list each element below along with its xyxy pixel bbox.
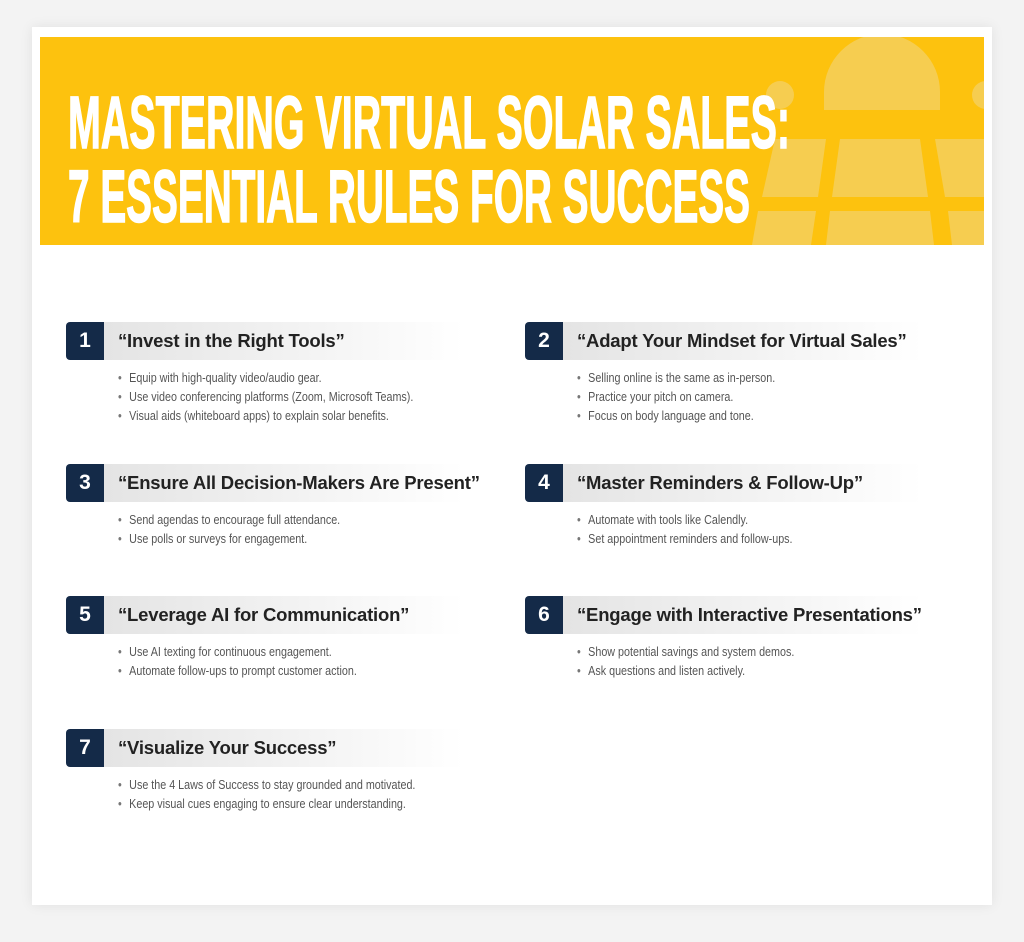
rule 7: 7 — [79, 736, 91, 759]
rule 5 — [66, 596, 409, 678]
text: Ask questions and listen actively. — [588, 664, 745, 678]
rule 4 — [525, 464, 863, 546]
rule 1: 1 — [79, 329, 91, 352]
text: Equip with high-quality video/audio gear. — [129, 371, 322, 385]
text: Show potential savings and system demos. — [588, 645, 794, 659]
rule 4: 4 — [538, 471, 550, 494]
text: Practice your pitch on camera. — [588, 390, 733, 404]
icon: solar panel decoration — [752, 34, 1000, 245]
rule 2: 2 — [538, 329, 550, 352]
text: Use video conferencing platforms (Zoom, Microsoft Teams). — [129, 390, 413, 404]
text: Visual aids (whiteboard apps) to explain solar benefits. — [129, 409, 389, 423]
rule 1: “Invest in the Right Tools” — [118, 330, 345, 351]
rule 2 — [525, 322, 907, 423]
rule 1 — [66, 322, 413, 423]
rule 7: “Visualize Your Success” — [118, 737, 336, 758]
text: Automate follow-ups to prompt customer action. — [129, 664, 357, 678]
rule 3 — [66, 464, 480, 546]
rule 4: “Master Reminders & Follow-Up” — [577, 472, 863, 493]
rule 3: “Ensure All Decision-Makers Are Present” — [118, 472, 480, 493]
title — [68, 81, 790, 238]
rule 7 — [66, 729, 415, 811]
rule 6: 6 — [538, 603, 550, 626]
text: Selling online is the same as in-person. — [588, 371, 775, 385]
rule 5: 5 — [79, 603, 91, 626]
text: Automate with tools like Calendly. — [588, 513, 748, 527]
rule 5: “Leverage AI for Communication” — [118, 604, 409, 625]
text: Send agendas to encourage full attendance. — [129, 513, 340, 527]
text: Keep visual cues engaging to ensure clear understanding. — [129, 797, 406, 811]
banner — [40, 37, 984, 245]
text: Use AI texting for continuous engagement. — [129, 645, 332, 659]
rule 6: “Engage with Interactive Presentations” — [577, 604, 922, 625]
text: Focus on body language and tone. — [588, 409, 754, 423]
rule 3: 3 — [79, 471, 91, 494]
rule 2: “Adapt Your Mindset for Virtual Sales” — [577, 330, 907, 351]
text: Set appointment reminders and follow-ups. — [588, 532, 793, 546]
text: Use polls or surveys for engagement. — [129, 532, 307, 546]
rule 6 — [525, 596, 922, 678]
text: Use the 4 Laws of Success to stay grounded and motivated. — [129, 778, 415, 792]
